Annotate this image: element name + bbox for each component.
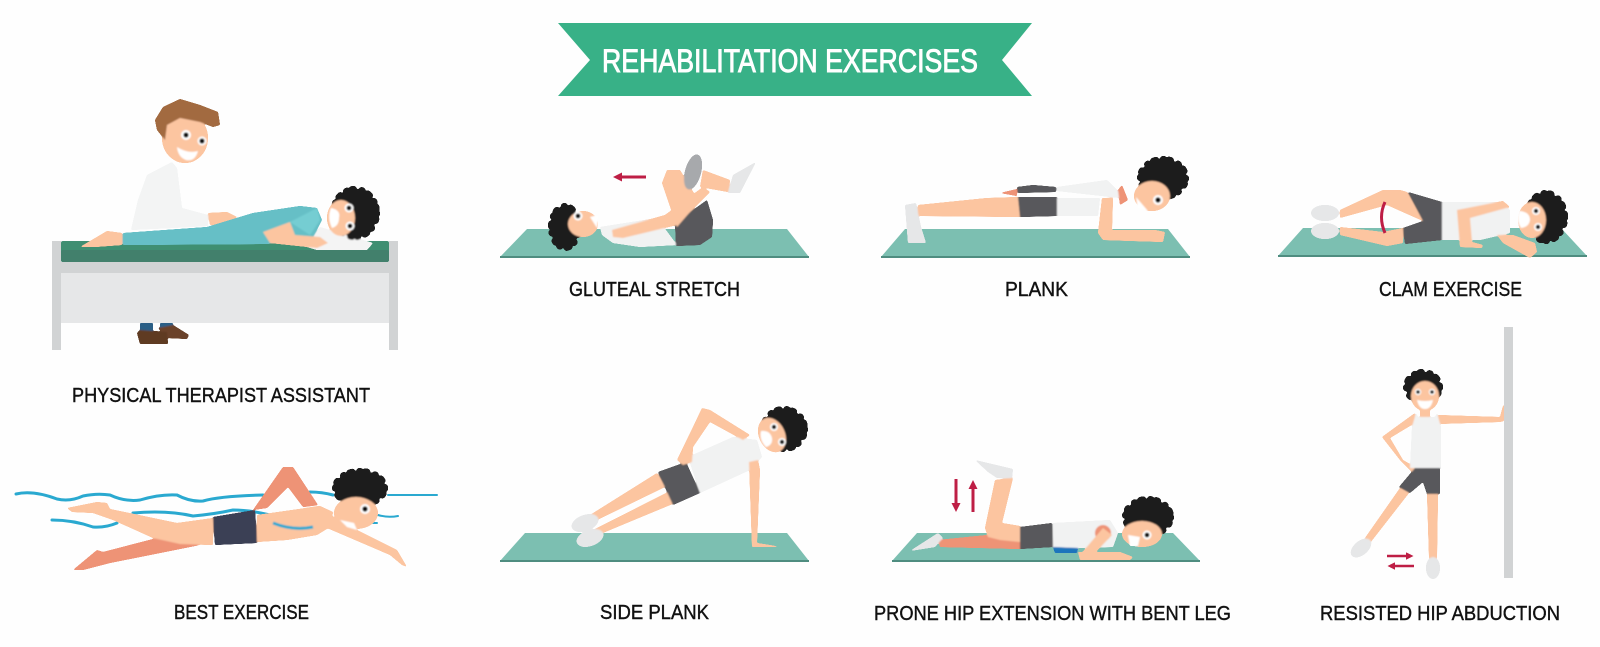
exercise mat: [500, 533, 809, 561]
arrows: [956, 479, 973, 512]
panel: plank: [881, 159, 1190, 258]
label: prone hip extension with bent leg: PRONE HIP EXTENSION WITH BENT LEG: [874, 603, 1231, 625]
mat edge: [500, 256, 809, 258]
label: side plank: SIDE PLANK: [600, 602, 710, 624]
icon: therapist: [131, 99, 237, 344]
figure standing: [1347, 372, 1504, 579]
exercise mat: [500, 229, 809, 257]
figure lying with knee pulled in: [551, 153, 756, 248]
title banner: [558, 23, 1032, 96]
exercise mat: [1278, 228, 1587, 256]
mat edge: [1278, 255, 1587, 257]
figure lying prone: [910, 460, 1171, 560]
arrows: [1387, 556, 1414, 566]
label: plank: PLANK: [1005, 279, 1069, 301]
title banner: REHABILITATION EXERCISES: [602, 43, 978, 79]
mat edge: [881, 256, 1190, 258]
icon: treatment bed: [52, 241, 398, 350]
figure in side plank: [569, 408, 805, 550]
water waves: [16, 492, 437, 527]
panel: resisted hip abduction: [1347, 327, 1513, 579]
panel: best exercise swimming: [16, 467, 437, 570]
label: resisted hip abduction: RESISTED HIP ABDUCTION: [1320, 603, 1560, 625]
arrow: [1382, 202, 1385, 233]
panel: gluteal stretch: [500, 153, 809, 258]
panel: side plank: [500, 408, 809, 562]
icon: patient lying down: [80, 189, 377, 250]
label: clam exercise: CLAM EXERCISE: [1379, 279, 1522, 301]
wall post: [1504, 327, 1513, 578]
panel: prone hip extension with bent leg: [892, 460, 1200, 562]
panel: clam exercise: [1278, 190, 1587, 258]
label: physical therapist assistant: PHYSICAL THERAPIST ASSISTANT: [72, 385, 370, 407]
figure swimming: [67, 467, 407, 570]
label: gluteal stretch: GLUTEAL STRETCH: [569, 279, 740, 301]
figure in plank: [905, 159, 1186, 243]
arrow: [616, 176, 646, 178]
exercise mat: [892, 533, 1200, 561]
mat edge: [892, 560, 1200, 562]
exercise mat: [881, 229, 1190, 257]
label: best exercise: BEST EXERCISE: [174, 602, 309, 624]
mat edge: [500, 560, 809, 562]
figure on side: [1311, 190, 1565, 258]
panel: physical therapist assistant: [52, 99, 398, 350]
